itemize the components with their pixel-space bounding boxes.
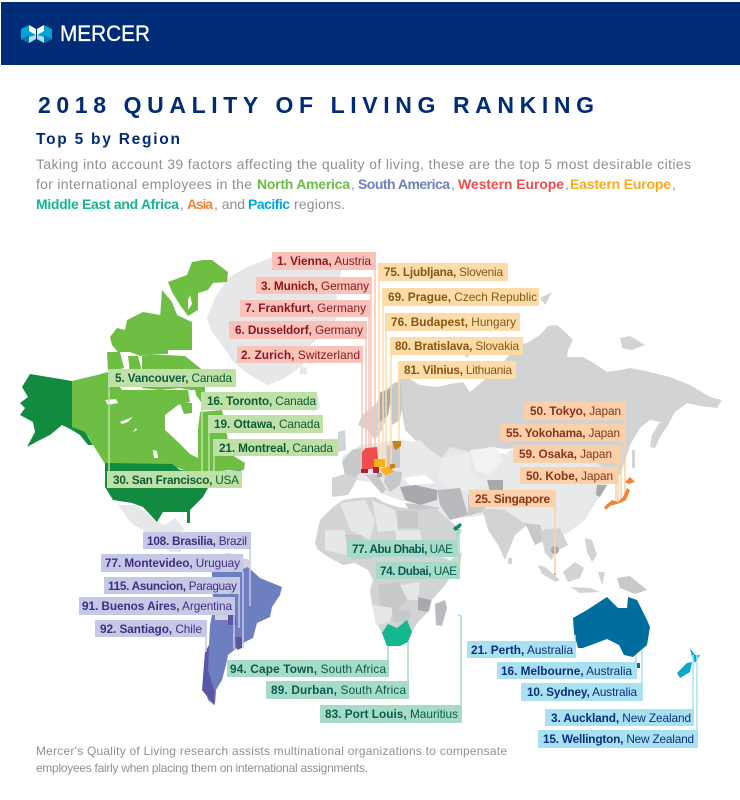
map: South Africa — [382, 620, 412, 646]
label: Frankfurt — [240, 300, 370, 460]
label: Ottawa: 19. Ottawa, Canada — [214, 417, 320, 431]
labels: Middle East and Africa — [227, 528, 462, 723]
label: Vancouver — [108, 369, 236, 471]
label: Cape Town: 94. Cape Town, South Africa — [230, 662, 386, 676]
label: Osaka: 59. Osaka, Japan — [519, 447, 612, 461]
label: Durban: 89. Durban, South Africa — [271, 683, 406, 697]
label: Tokyo: 50. Tokyo, Japan — [530, 404, 621, 418]
map: Mauritius marker — [458, 614, 460, 616]
intro text block: , — [451, 176, 455, 192]
label: San Francisco: 30. San Francisco, USA — [113, 473, 239, 487]
map: Southeast Asia islands — [538, 538, 647, 594]
label: Abu Dhabi: 77. Abu Dhabi, UAE — [352, 542, 453, 556]
map: Alaska — [20, 374, 93, 447]
label: Zurich — [237, 346, 363, 470]
label: Ljubljana — [378, 263, 508, 474]
label: Melbourne — [497, 655, 637, 679]
label: Frankfurt: 7. Frankfurt, Germany — [245, 301, 366, 315]
intro text block: Taking into account 39 factors affecting the quality of living, these are the top 5 most desirable cities — [36, 156, 691, 172]
label: Bratislava: 80. Bratislava, Slovakia — [395, 339, 519, 353]
title: 2018 QUALITY OF LIVING RANKING — [38, 92, 594, 118]
labels: Pacific — [467, 635, 698, 748]
label: Buenos Aires: 91. Buenos Aires, Argentina — [82, 599, 232, 613]
label: Abu Dhabi — [347, 530, 458, 557]
label: Vilnius — [398, 361, 516, 441]
intro text block: North America — [257, 176, 350, 192]
labels: Eastern Europe — [378, 263, 539, 474]
labels: Asia — [469, 402, 626, 575]
map: Mexico and Central America — [118, 505, 250, 572]
map: Russia and northern Asia — [398, 325, 722, 478]
label: Perth: 21. Perth, Australia — [471, 643, 573, 657]
label: Yokohama: 55. Yokohama, Japan — [506, 426, 620, 440]
map: Scandinavia — [358, 380, 403, 440]
intro text block: South America — [358, 176, 450, 192]
map: Canada — [72, 260, 245, 475]
map: Africa — [315, 497, 462, 646]
map: highlighted Eastern Europe countries — [374, 441, 401, 477]
label: Sydney: 10. Sydney, Australia — [527, 685, 637, 699]
label: Auckland: 3. Auckland, New Zealand — [551, 711, 691, 725]
map: Greenland and Iceland — [207, 252, 345, 412]
label: Yokohama — [500, 424, 626, 501]
map: Western and Southern Europe — [332, 430, 437, 505]
label: Ljubljana: 75. Ljubljana, Slovenia — [384, 265, 503, 279]
map: UAE — [453, 523, 462, 531]
intro text block: Eastern Europe — [570, 176, 671, 192]
label: Wellington: 15. Wellington, New Zealand — [543, 732, 694, 746]
label: Dusseldorf: 6. Dusseldorf, Germany — [235, 323, 363, 337]
label: Montreal — [213, 439, 338, 471]
label: Toronto — [201, 392, 317, 471]
intro text block: , and — [214, 196, 245, 212]
map: islands of the north and Sakhalin — [460, 292, 645, 468]
label: Ottawa — [208, 415, 323, 471]
intro text block: , — [565, 176, 569, 192]
label: Santiago: 92. Santiago, Chile — [100, 622, 202, 636]
intro text block: regions. — [294, 196, 345, 212]
header banner — [1, 2, 740, 65]
label: Dubai — [376, 528, 460, 579]
label: Budapest: 76. Budapest, Hungary — [391, 315, 516, 329]
labels: North America — [107, 369, 338, 488]
labels: South America — [79, 532, 251, 652]
map: Australia — [573, 597, 650, 668]
label: Asuncion — [104, 577, 240, 628]
footer note: employees fairly when placing them on international assignments. — [36, 761, 368, 775]
label: Dusseldorf — [229, 321, 367, 455]
label: Asuncion: 115. Asuncion, Paraguay — [108, 579, 237, 593]
map: Eurasia land backing — [342, 440, 612, 535]
intro text block — [36, 156, 691, 212]
map: Contiguous United States — [105, 463, 242, 523]
label: Port Louis: 83. Port Louis, Mauritius — [325, 707, 458, 721]
label: Vancouver: 5. Vancouver, Canada — [115, 371, 232, 385]
map: Japan — [604, 477, 635, 510]
label: Osaka — [513, 445, 619, 503]
map: Middle East and South Asia — [405, 488, 568, 564]
intro text block: Asia — [187, 196, 213, 212]
map: Canadian lakes — [105, 295, 192, 458]
label: Tokyo — [524, 402, 626, 495]
label: Dubai: 74. Dubai, UAE — [380, 564, 457, 578]
footer note — [36, 744, 507, 775]
subheading: Top 5 by Region — [36, 131, 180, 148]
map: South America — [202, 567, 282, 705]
label: Brasilia — [143, 532, 251, 606]
logo wordmark: MERCER — [60, 21, 150, 46]
intro text block: , — [180, 196, 184, 212]
label: Sydney — [521, 650, 643, 701]
footer note: Mercer's Quality of Living research assists multinational organizations to compensate — [36, 744, 507, 758]
label: Melbourne: 16. Melbourne, Australia — [501, 664, 632, 678]
label: Singapore — [469, 490, 556, 575]
label: Port Louis — [320, 615, 462, 723]
label: Wellington — [538, 655, 698, 748]
label: Vienna: 1. Vienna, Austria — [277, 254, 371, 268]
label: Kobe: 50. Kobe, Japan — [526, 469, 613, 483]
map: Eastern Europe and Central Asia — [385, 440, 612, 530]
intro text block: for international employees in the — [36, 176, 252, 192]
label: Prague — [382, 288, 539, 461]
label: Munich — [256, 277, 372, 465]
label: Montreal: 21. Montreal, Canada — [219, 441, 333, 455]
label: Montevideo: 77. Montevideo, Uruguay — [105, 556, 240, 570]
label: Vienna — [272, 252, 376, 468]
labels: Western Europe — [229, 252, 376, 470]
label: Toronto: 16. Toronto, Canada — [207, 394, 316, 408]
map: highlighted cities in Germany, Switzerland and Austria — [361, 447, 379, 473]
label: Durban — [266, 642, 409, 699]
label: Bratislava — [390, 337, 523, 465]
intro text block: Pacific — [248, 196, 290, 212]
intro text block: Western Europe — [458, 176, 564, 192]
label: Santiago — [95, 620, 207, 652]
label: Singapore: 25. Singapore — [475, 492, 550, 506]
label: Brasilia: 108. Brasilia, Brazil — [147, 534, 247, 548]
label: Vilnius: 81. Vilnius, Lithuania — [404, 363, 512, 377]
label: Munich: 3. Munich, Germany — [261, 279, 369, 293]
icon: Mercer logo — [21, 25, 52, 43]
intro text block: , — [672, 176, 676, 192]
label: Perth — [467, 635, 576, 658]
intro text block: Middle East and Africa — [36, 196, 179, 212]
map: New Zealand — [677, 648, 700, 678]
label: Auckland — [545, 655, 694, 726]
label: Buenos Aires — [79, 597, 235, 649]
intro text block: , — [351, 176, 355, 192]
world map — [20, 252, 722, 705]
label: Kobe — [520, 467, 618, 504]
label: Prague: 69. Prague, Czech Republic — [388, 290, 537, 304]
label: Zurich: 2. Zurich, Switzerland — [241, 348, 360, 362]
label: Cape Town — [227, 646, 389, 677]
label: Montevideo — [101, 554, 243, 648]
label: Budapest — [385, 313, 520, 470]
